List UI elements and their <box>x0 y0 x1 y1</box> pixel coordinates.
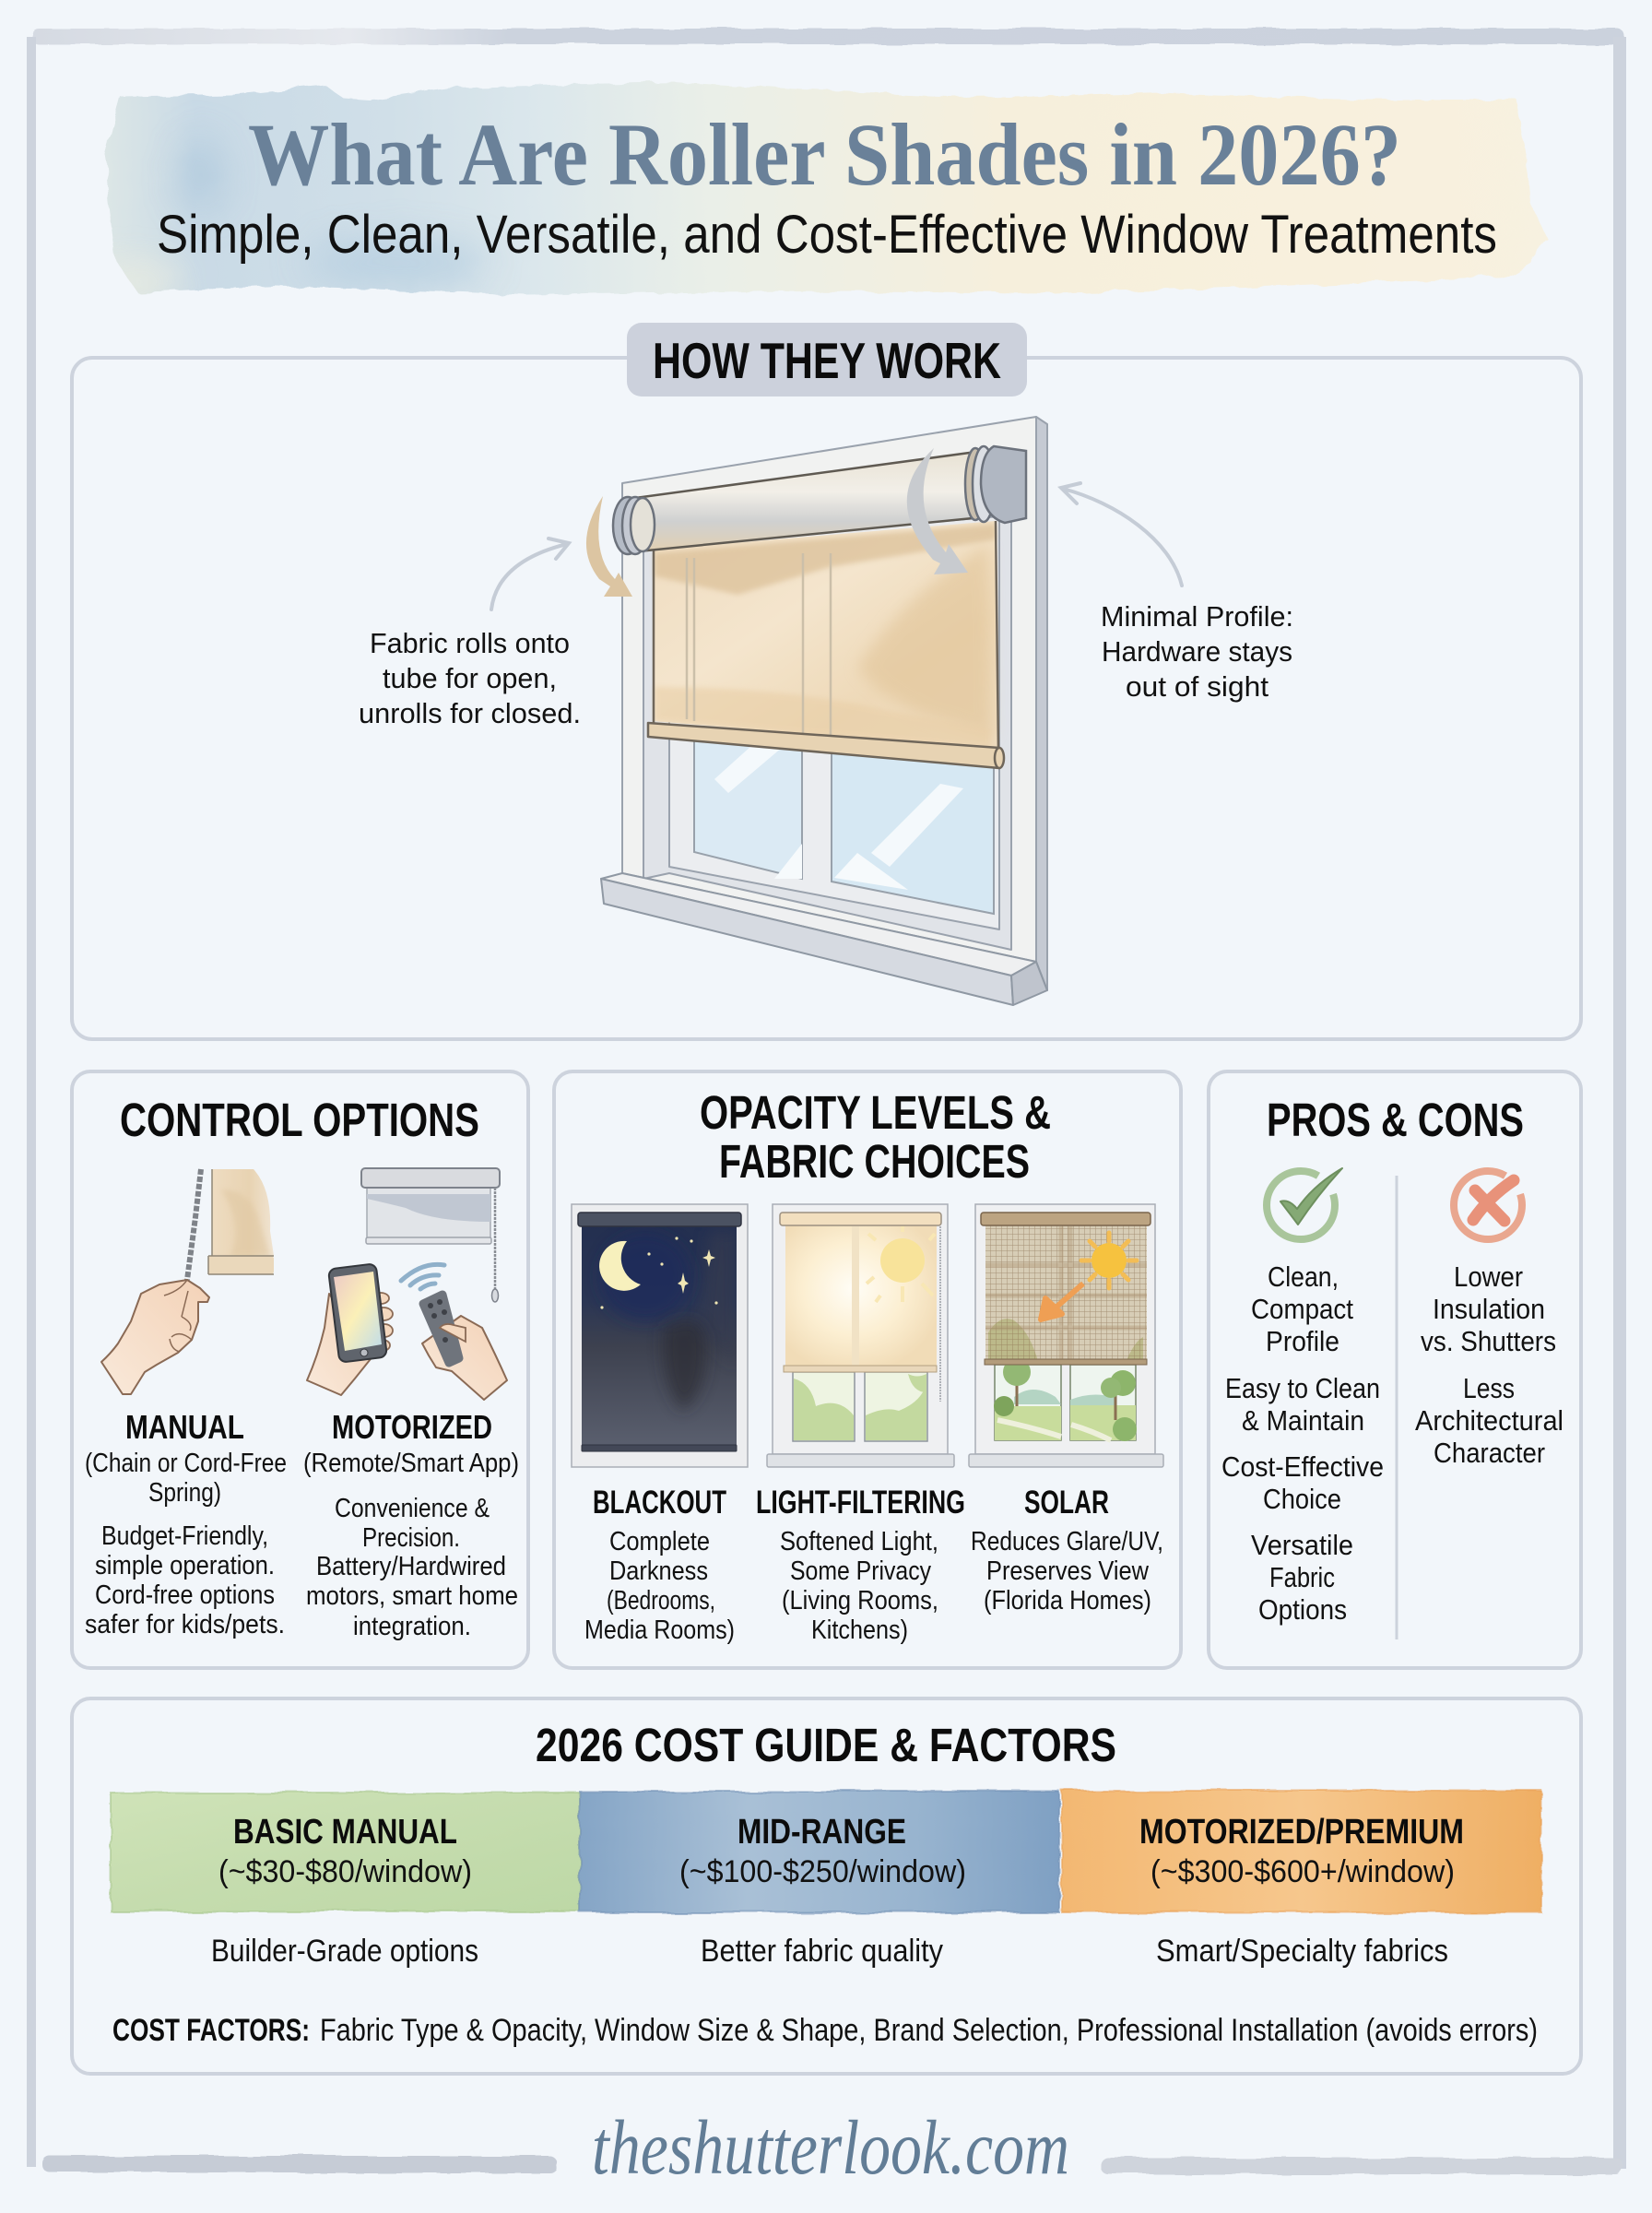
tier: motorized premium <box>1062 1791 1541 1912</box>
column: manual <box>85 1408 287 1639</box>
heading: cost guide: 2026 COST GUIDE & FACTORS <box>536 1719 1116 1771</box>
left end cap <box>613 497 655 554</box>
sun with rays <box>1081 1233 1137 1288</box>
column: manual: safer for kids/pets. <box>85 1610 285 1639</box>
column: manual: Cord-free options <box>95 1580 275 1610</box>
tier: basic manual: BASIC MANUAL <box>233 1813 457 1852</box>
icon: phone, remote and motorized shade <box>307 1168 507 1400</box>
list: pros: Compact <box>1251 1293 1353 1325</box>
roller tube <box>629 452 982 551</box>
heading: control options: CONTROL OPTIONS <box>120 1094 479 1146</box>
column: blackout: (Bedrooms, <box>607 1586 715 1615</box>
heading: pros and cons: PROS & CONS <box>1267 1094 1524 1146</box>
list: cons: Lower <box>1454 1260 1523 1293</box>
column: motorized: (Remote/Smart App) <box>303 1449 519 1478</box>
callout text: out of sight <box>1126 670 1268 703</box>
column: light-filtering: (Living Rooms, <box>782 1586 938 1615</box>
tier: motorized premium: (~$300-$600+/window) <box>1150 1854 1455 1889</box>
callout text: Minimal Profile: <box>1101 600 1293 633</box>
column: motorized: Convenience & <box>335 1494 490 1523</box>
column: motorized: motors, smart home <box>306 1581 518 1611</box>
footer: website: theshutterlook.com <box>592 2105 1069 2191</box>
tier: mid-range: MID-RANGE <box>738 1813 906 1852</box>
list: pros: Options <box>1258 1593 1347 1626</box>
tier: mid-range <box>580 1792 1059 1912</box>
column: solar: Reduces Glare/UV, <box>971 1527 1163 1556</box>
list: cons: Less <box>1463 1372 1515 1404</box>
panel: control options <box>72 1071 528 1668</box>
list: pros <box>1221 1260 1384 1626</box>
divider <box>1396 1176 1398 1639</box>
window frame <box>622 417 1047 990</box>
icon: cross mark <box>1454 1171 1522 1239</box>
main title: What Are Roller Shades in 2026? <box>248 105 1401 204</box>
callout: minimal profile <box>1061 483 1293 703</box>
column: manual: simple operation. <box>95 1551 275 1580</box>
tier: motorized premium: MOTORIZED/PREMIUM <box>1139 1813 1464 1852</box>
list: cons: Architectural <box>1415 1404 1564 1437</box>
column: manual: Spring) <box>148 1478 221 1508</box>
arrow: roll down tan <box>586 496 632 597</box>
arrow: reduced glare <box>1041 1284 1083 1320</box>
list: pros: Cost-Effective <box>1221 1450 1384 1483</box>
heading pill: how they work <box>627 323 1027 396</box>
list: pros: Choice <box>1263 1483 1341 1515</box>
list: pros: & Maintain <box>1242 1404 1364 1437</box>
callout text <box>1101 600 1293 703</box>
column: manual: (Chain or Cord-Free <box>85 1449 287 1478</box>
column: motorized: Precision. <box>362 1523 460 1553</box>
heading: opacity levels: FABRIC CHOICES <box>719 1135 1030 1188</box>
window sill <box>601 873 1047 1005</box>
right end cap <box>965 446 1026 523</box>
bottom bar <box>648 723 1004 768</box>
tier: basic manual <box>111 1793 580 1911</box>
tier notes: Better fabric quality <box>701 1934 943 1969</box>
heading pill: how they work: HOW THEY WORK <box>653 332 1001 389</box>
callout: fabric rolls <box>359 538 581 729</box>
column: light-filtering <box>756 1485 965 1645</box>
column: solar: SOLAR <box>1024 1485 1109 1521</box>
arrow: roll down grey <box>907 448 968 574</box>
tier: mid-range: (~$100-$250/window) <box>679 1854 966 1889</box>
column: solar: Preserves View <box>986 1556 1150 1586</box>
column: solar: (Florida Homes) <box>984 1586 1151 1615</box>
callout text: Hardware stays <box>1102 635 1292 668</box>
list: cons: vs. Shutters <box>1421 1325 1556 1357</box>
icon: check mark <box>1267 1168 1342 1239</box>
list: pros: Clean, <box>1268 1260 1339 1293</box>
column: light-filtering: Some Privacy <box>790 1556 931 1586</box>
illustration: solar window <box>969 1204 1163 1467</box>
list: pros: Fabric <box>1269 1561 1335 1593</box>
subtitle: Simple, Clean, Versatile, and Cost-Effective Window Treatments <box>157 205 1497 265</box>
column: light-filtering: LIGHT-FILTERING <box>756 1485 965 1521</box>
panel: cost guide <box>72 1698 1581 2074</box>
callout text: tube for open, <box>383 662 557 694</box>
column: motorized: MOTORIZED <box>332 1408 492 1446</box>
tier notes: Builder-Grade options <box>211 1934 478 1969</box>
arrow to left end of roller <box>491 538 569 609</box>
list: pros: Versatile <box>1251 1529 1353 1561</box>
column: light-filtering: Kitchens) <box>811 1615 908 1645</box>
panel: how they work <box>72 323 1581 1039</box>
callout text <box>359 627 581 729</box>
column: manual: MANUAL <box>125 1408 244 1446</box>
panel: pros and cons <box>1209 1071 1581 1668</box>
column: motorized: Battery/Hardwired <box>316 1552 506 1581</box>
list: pros: Profile <box>1266 1325 1339 1357</box>
arrow to right end of roller <box>1061 483 1182 586</box>
stars <box>600 1237 718 1309</box>
illustration: blackout window <box>572 1204 748 1467</box>
column: motorized: integration. <box>353 1612 471 1641</box>
panel: opacity levels and fabric choices <box>554 1071 1181 1668</box>
column: manual: Budget-Friendly, <box>101 1521 268 1551</box>
tier notes: Smart/Specialty fabrics <box>1156 1934 1448 1969</box>
column: blackout <box>584 1485 735 1645</box>
callout text: unrolls for closed. <box>359 697 581 729</box>
column: blackout: BLACKOUT <box>593 1485 726 1521</box>
heading: opacity levels: OPACITY LEVELS & <box>700 1086 1051 1139</box>
column: light-filtering: Softened Light, <box>780 1527 938 1556</box>
tier: basic manual: (~$30-$80/window) <box>218 1854 472 1889</box>
cost factors: COST FACTORS: <box>112 2013 310 2048</box>
icon: hand pulling chain <box>101 1169 274 1394</box>
list: cons: Character <box>1434 1437 1545 1469</box>
illustration: window with roller shade <box>586 417 1047 1005</box>
column: solar <box>971 1485 1163 1615</box>
callout text: Fabric rolls onto <box>370 627 570 659</box>
list: cons <box>1415 1260 1564 1469</box>
window panes <box>694 728 994 914</box>
column: blackout: Media Rooms) <box>584 1615 735 1645</box>
heading: opacity levels <box>700 1086 1051 1188</box>
banner watercolor wash <box>92 74 1567 304</box>
moon <box>599 1241 641 1291</box>
column: motorized <box>303 1408 519 1641</box>
column: blackout: Complete <box>609 1527 710 1556</box>
list: pros: Easy to Clean <box>1225 1372 1380 1404</box>
shade fabric <box>654 521 998 751</box>
column: blackout: Darkness <box>609 1556 708 1586</box>
title banner <box>92 74 1567 304</box>
list: cons: Insulation <box>1433 1293 1545 1325</box>
illustration: light-filtering window <box>767 1204 954 1467</box>
tier notes <box>211 1934 1448 1969</box>
